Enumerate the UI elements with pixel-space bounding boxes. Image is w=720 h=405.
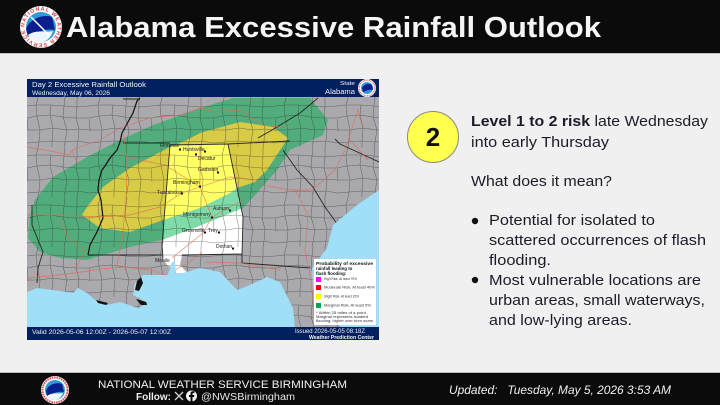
bullet: potential flooding: [472, 212, 706, 269]
map legend: Slight Risk, At least 15%: [324, 294, 359, 298]
risk level badge: [408, 112, 458, 162]
city labels: [155, 143, 232, 264]
city labels: Decatur: [198, 156, 216, 162]
title: Alabama Excessive Rainfall Outlook: [66, 12, 601, 44]
text block: risk statement: [471, 113, 709, 190]
Mobile Bay: [170, 262, 176, 273]
text block: risk statement: Level 1 to 2 risk late Wednesday: [471, 113, 709, 130]
icon: footer NWS logo: [41, 376, 69, 404]
city labels: Montgomery: [183, 212, 211, 218]
question heading: What does it mean?: [471, 173, 612, 190]
bullet: potential flooding: Potential for isolated to: [489, 212, 655, 229]
map legend: Marginal represents isolated: [316, 315, 368, 319]
map legend: rainfall leading to: [316, 266, 353, 271]
footer bar: [0, 372, 720, 405]
map bottom band: Weather Prediction Center: [309, 335, 375, 341]
city labels: Florence: [160, 143, 180, 149]
map top band: Day 2 Excessive Rainfall Outlook: [32, 80, 146, 89]
map top band: Wednesday, May 06, 2026: [32, 90, 111, 97]
map legend: Marginal Risk, At least 5%: [324, 304, 371, 308]
highways: [27, 108, 368, 325]
Mississippi river: [88, 98, 140, 255]
bullet: potential flooding: flooding.: [489, 252, 551, 269]
map bottom band: [27, 327, 379, 341]
city labels: Mobile: [155, 258, 170, 264]
bullet list: [472, 212, 706, 329]
panel: rainfall outlook map: [27, 79, 379, 341]
footer updated timestamp: Updated: Tuesday, May 5, 2026 3:53 AM: [449, 385, 671, 397]
text block: risk statement: into early Thursday: [471, 134, 610, 151]
icon: Facebook: [186, 390, 197, 402]
footer social handle: [136, 390, 295, 403]
map legend: High Risk, At least 70%: [324, 277, 357, 281]
map legend: flash flooding:: [316, 271, 347, 276]
city labels: Greenville: [182, 228, 205, 234]
footer social handle: @NWSBirmingham: [201, 392, 295, 403]
city labels: Auburn: [213, 206, 229, 212]
bullet: vulnerable locations: [472, 272, 705, 329]
city labels: Dothan: [216, 244, 232, 250]
map legend: Moderate Risk, At least 40%: [324, 286, 375, 290]
map legend: * Within 25 miles of a point.: [316, 311, 367, 315]
footer social handle: Follow:: [136, 392, 171, 403]
bullet: potential flooding: scattered occurrences of flash: [489, 232, 706, 249]
risk level badge: 2: [426, 122, 440, 152]
bullet: vulnerable locations: urban areas, small waterways,: [489, 292, 705, 309]
city labels: Gadsden: [198, 167, 219, 173]
city labels: Tuscaloosa: [157, 190, 183, 196]
icon: small NWS logo: [358, 79, 376, 97]
city labels: Birmingham: [173, 180, 200, 186]
map bottom band: Issued 2026-05-05 08:18Z: [295, 328, 365, 335]
city labels: Troy: [208, 228, 218, 234]
bullet: vulnerable locations: Most vulnerable locations are: [489, 272, 701, 289]
icon: X: [175, 392, 183, 400]
map bottom band: Valid 2026-05-06 12:00Z - 2026-05-07 12:00Z: [32, 329, 171, 336]
map top band: [27, 79, 379, 97]
icon: NWS logo: NATIONAL WEATHER SERVICE: [20, 6, 62, 48]
map top band: State: [340, 81, 355, 87]
map top band: Alabama: [325, 89, 355, 96]
map legend: Probability of excessive: [316, 261, 374, 266]
Louisiana delta marsh: [96, 277, 147, 305]
state borders: [32, 98, 379, 283]
map legend: flooding; higher over burn scars: [316, 319, 373, 323]
city dots: [179, 148, 234, 250]
bullet: vulnerable locations: and low-lying areas.: [489, 312, 632, 329]
header bar: [0, 0, 720, 54]
map land and risk areas: [27, 97, 379, 327]
map legend: [314, 259, 376, 325]
city labels: Huntsville: [183, 147, 205, 153]
footer office name: NATIONAL WEATHER SERVICE BIRMINGHAM: [98, 379, 347, 391]
